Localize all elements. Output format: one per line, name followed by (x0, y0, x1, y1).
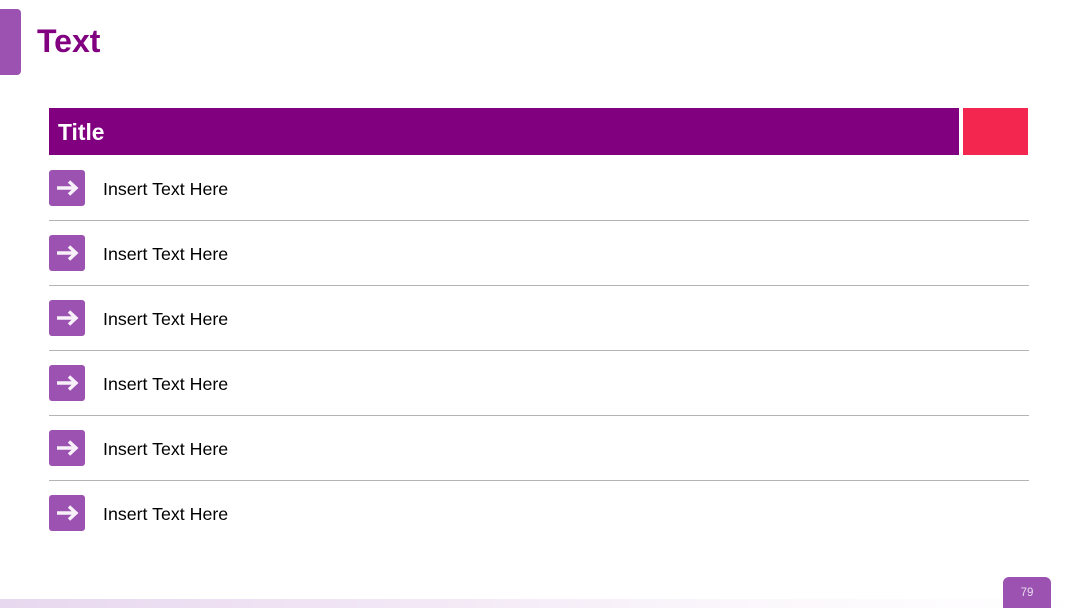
row text: Insert Text Here (103, 504, 228, 524)
icon: arrow (49, 235, 85, 271)
row 6 (49, 495, 228, 531)
row 4 (49, 365, 228, 401)
row 3 (49, 300, 228, 336)
red header block (963, 108, 1028, 155)
icon: arrow (49, 300, 85, 336)
header accent tab (0, 9, 21, 75)
row text: Insert Text Here (103, 179, 228, 199)
icon: arrow (49, 170, 85, 206)
footer gradient band (0, 599, 1080, 608)
page number badge (1003, 577, 1051, 608)
icon: arrow (49, 430, 85, 466)
row 2 (49, 235, 228, 271)
title: Text (37, 23, 100, 59)
icon: arrow (49, 365, 85, 401)
row 1 (49, 170, 228, 206)
row text: Insert Text Here (103, 244, 228, 264)
icon: arrow (49, 495, 85, 531)
row text: Insert Text Here (103, 439, 228, 459)
table header bar (49, 108, 959, 155)
row text: Insert Text Here (103, 374, 228, 394)
page number: 79 (1021, 587, 1033, 599)
table header title: Title (58, 119, 104, 145)
row 5 (49, 430, 228, 466)
row text: Insert Text Here (103, 309, 228, 329)
